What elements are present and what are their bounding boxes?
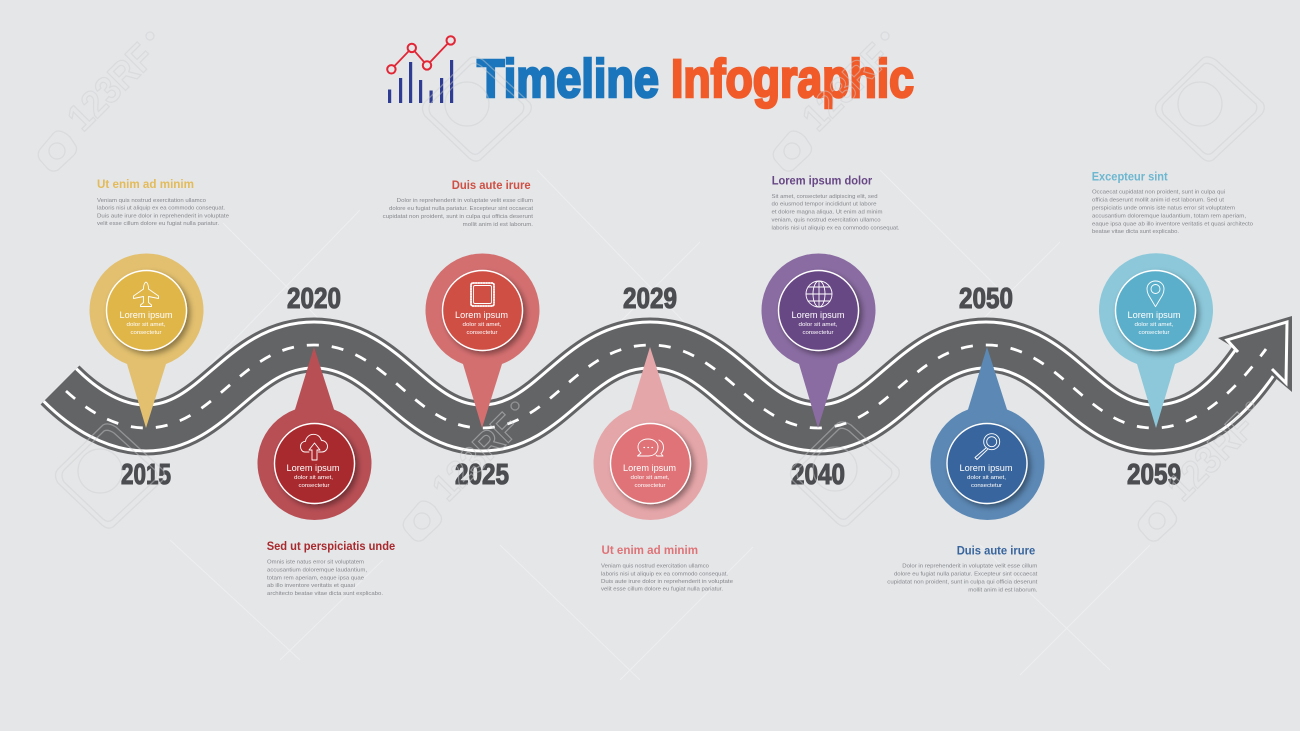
pin: blue magnifier [930, 347, 1044, 520]
watermark: top-right badge [1156, 57, 1264, 161]
pin: dark red cloud: consectetur [298, 483, 330, 489]
text block: Sed ut perspiciatis unde (dark red): Sed ut perspiciatis unde [267, 541, 395, 553]
pin: blue magnifier: dolor sit amet, [967, 475, 1006, 481]
title: logo and heading [387, 36, 914, 109]
pin: pink chat [594, 347, 708, 520]
text block: Duis aute irure (blue) [887, 546, 1038, 593]
pin: yellow airplane: Lorem ipsum [120, 310, 173, 321]
watermark: bottom logo 2 [403, 402, 528, 541]
text block: Duis aute irure (blue): mollit anim id est laborum. [968, 587, 1038, 593]
text block: Sed ut perspiciatis unde (dark red): accusantium doloremque laudantium, [267, 567, 367, 573]
text block: Duis aute irure (coral): dolore eu fugiat nulla pariatur. Excepteur sint occaecat [389, 206, 533, 212]
pin: purple globe: dolor sit amet, [798, 322, 838, 328]
year 2015: 2015 [121, 459, 171, 491]
pin: dark red cloud [258, 347, 372, 520]
pin: purple globe [762, 253, 876, 428]
watermark: bottom-right logo [1138, 402, 1263, 541]
heading: Timeline: Timeline [477, 49, 659, 109]
icon: globe [806, 281, 832, 307]
pin: teal location: Lorem ipsum [1128, 310, 1181, 321]
text block: Duis aute irure (blue): cupidatat non proident, sunt in culpa qui officia deserunt [887, 579, 1038, 585]
text block: Sed ut perspiciatis unde (dark red) [267, 541, 395, 597]
text block: Sed ut perspiciatis unde (dark red): ab illo inventore veritatis et quasi [267, 583, 355, 589]
watermark: top-left logo: 123RF [60, 36, 163, 139]
icon: chart logo [387, 36, 455, 103]
text block: Lorem ipsum dolor (purple): do eiusmod tempor incididunt ut labore [772, 202, 876, 208]
text block: Lorem ipsum dolor (purple): Lorem ipsum dolor [772, 176, 873, 188]
text block: Lorem ipsum dolor (purple): et dolore magna aliqua. Ut enim ad minim [772, 209, 883, 215]
text block: Excepteur sint (teal) [1092, 172, 1253, 235]
text block: Excepteur sint (teal): beatae vitae dicta sunt explicabo. [1092, 229, 1179, 235]
icon: speech bubbles [638, 439, 664, 456]
year 2059: 2059 [1127, 459, 1181, 491]
pin: purple globe: consectetur [802, 330, 834, 336]
text block: Lorem ipsum dolor (purple): veniam, quis nostrud exercitation ullamco [772, 217, 880, 223]
text block: Ut enim ad minim (yellow) [97, 179, 229, 227]
icon: magnifier [975, 434, 1000, 460]
pin: purple globe: Lorem ipsum [792, 310, 845, 321]
text block: Ut enim ad minim (pink) [601, 545, 733, 593]
text block: Sed ut perspiciatis unde (dark red): architecto beatae vitae dicta sunt explicabo. [267, 591, 383, 597]
pin: blue magnifier: Lorem ipsum [960, 463, 1013, 474]
text block: Lorem ipsum dolor (purple) [772, 176, 900, 231]
watermark: top logo 3 [773, 32, 898, 171]
pin: coral chip [426, 253, 539, 428]
watermark: top-left logo [38, 32, 163, 171]
pin: pink chat: consectetur [634, 483, 666, 489]
watermark: top logo 3: 123RF [795, 36, 898, 139]
icon: location marker [1147, 281, 1164, 307]
watermark: bottom badge 3 [790, 422, 899, 526]
text block: Duis aute irure (blue): dolore eu fugiat nulla pariatur. Excepteur sint occaecat [894, 572, 1038, 578]
text block: Excepteur sint (teal): Occaecat cupidatat non proident, sunt in culpa qui [1092, 190, 1225, 196]
text block: Lorem ipsum dolor (purple): Sit amet, consectetur adipiscing elit, sed [772, 194, 878, 200]
pin: yellow airplane [90, 253, 204, 428]
text block: Duis aute irure (blue): Duis aute irure [957, 546, 1035, 558]
year 2020: 2020 [287, 283, 341, 315]
pin: dark red cloud: dolor sit amet, [294, 475, 333, 481]
text block: Excepteur sint (teal): accusantium doloremque laudantium, totam rem aperiam, [1092, 213, 1246, 219]
text block: Duis aute irure (coral): Dolor in reprehenderit in voluptate velit esse cillum [397, 198, 533, 204]
pin: teal location: dolor sit amet, [1134, 322, 1174, 328]
pin: yellow airplane: consectetur [130, 330, 162, 336]
watermark: top badge 2 [422, 57, 531, 161]
icon: cloud upload [300, 434, 328, 460]
text block: Ut enim ad minim (pink): Veniam quis nostrud exercitation ullamco [601, 564, 709, 570]
year 2029: 2029 [623, 283, 677, 315]
text block: Ut enim ad minim (yellow): Veniam quis nostrud exercitation ullamco [97, 198, 206, 204]
text block: Sed ut perspiciatis unde (dark red): Omnis iste natus error sit voluptatem [267, 560, 364, 566]
text block: Ut enim ad minim (yellow): velit esse cillum dolore eu fugiat nulla pariatur. [97, 221, 219, 227]
pin: teal location [1099, 253, 1213, 428]
year 2050: 2050 [959, 283, 1013, 315]
text block: Ut enim ad minim (pink): Duis aute irure dolor in reprehenderit in voluptate [601, 579, 733, 585]
pin: blue magnifier: consectetur [971, 483, 1002, 489]
text block: Duis aute irure (coral): cupidatat non proident, sunt in culpa qui officia deserunt [383, 214, 533, 220]
pin: teal location: consectetur [1138, 330, 1170, 336]
text block: Duis aute irure (coral) [383, 180, 533, 228]
road with arrow [60, 316, 1292, 428]
heading: Infographic: Infographic [671, 49, 914, 109]
text block: Excepteur sint (teal): Excepteur sint [1092, 172, 1168, 184]
text block: Ut enim ad minim (pink): velit esse cillum dolore eu fugiat nulla pariatur. [601, 587, 723, 593]
pin: pink chat: Lorem ipsum [623, 463, 676, 474]
text block: Duis aute irure (coral): mollit anim id est laborum. [463, 222, 533, 228]
pin: coral chip: Lorem ipsum [455, 310, 508, 321]
year 2025: 2025 [455, 459, 509, 491]
watermark: bottom-right logo: 123RF [1160, 406, 1263, 509]
pin: yellow airplane: dolor sit amet, [126, 322, 166, 328]
pin: coral chip: dolor sit amet, [462, 322, 502, 328]
text block: Excepteur sint (teal): eaque ipsa quae ab illo inventore veritatis et quasi architecto [1092, 221, 1253, 227]
text block: Duis aute irure (coral): Duis aute irure [452, 180, 531, 192]
text block: Lorem ipsum dolor (purple): laboris nisi ut aliquip ex ea commodo consequat. [772, 225, 900, 231]
text block: Sed ut perspiciatis unde (dark red): totam rem aperiam, eaque ipsa quae [267, 575, 364, 581]
year 2040: 2040 [791, 459, 845, 491]
watermark: bottom-left badge [56, 424, 164, 528]
text block: Ut enim ad minim (pink): Ut enim ad minim [602, 545, 698, 557]
text block: Ut enim ad minim (yellow): Ut enim ad minim [97, 179, 194, 191]
icon: microchip [471, 283, 494, 306]
text block: Excepteur sint (teal): perspiciatis unde omnis iste natus error sit voluptatem [1092, 206, 1235, 212]
text block: Duis aute irure (blue): Dolor in reprehenderit in voluptate velit esse cillum [902, 564, 1038, 570]
watermark: bottom logo 2: 123RF [425, 406, 528, 509]
text block: Excepteur sint (teal): officia deserunt mollit anim id est laborum. Sed ut [1092, 198, 1224, 204]
pin: pink chat: dolor sit amet, [630, 475, 670, 481]
pin: coral chip: consectetur [466, 330, 498, 336]
icon: airplane [134, 282, 158, 306]
text block: Ut enim ad minim (pink): laboris nisi ut aliquip ex ea commodo consequat. [601, 571, 728, 577]
text block: Ut enim ad minim (yellow): laboris nisi ut aliquip ex ea commodo consequat. [97, 206, 225, 212]
text block: Ut enim ad minim (yellow): Duis aute irure dolor in reprehenderit in voluptate [97, 213, 229, 219]
pin: dark red cloud: Lorem ipsum [286, 463, 340, 474]
